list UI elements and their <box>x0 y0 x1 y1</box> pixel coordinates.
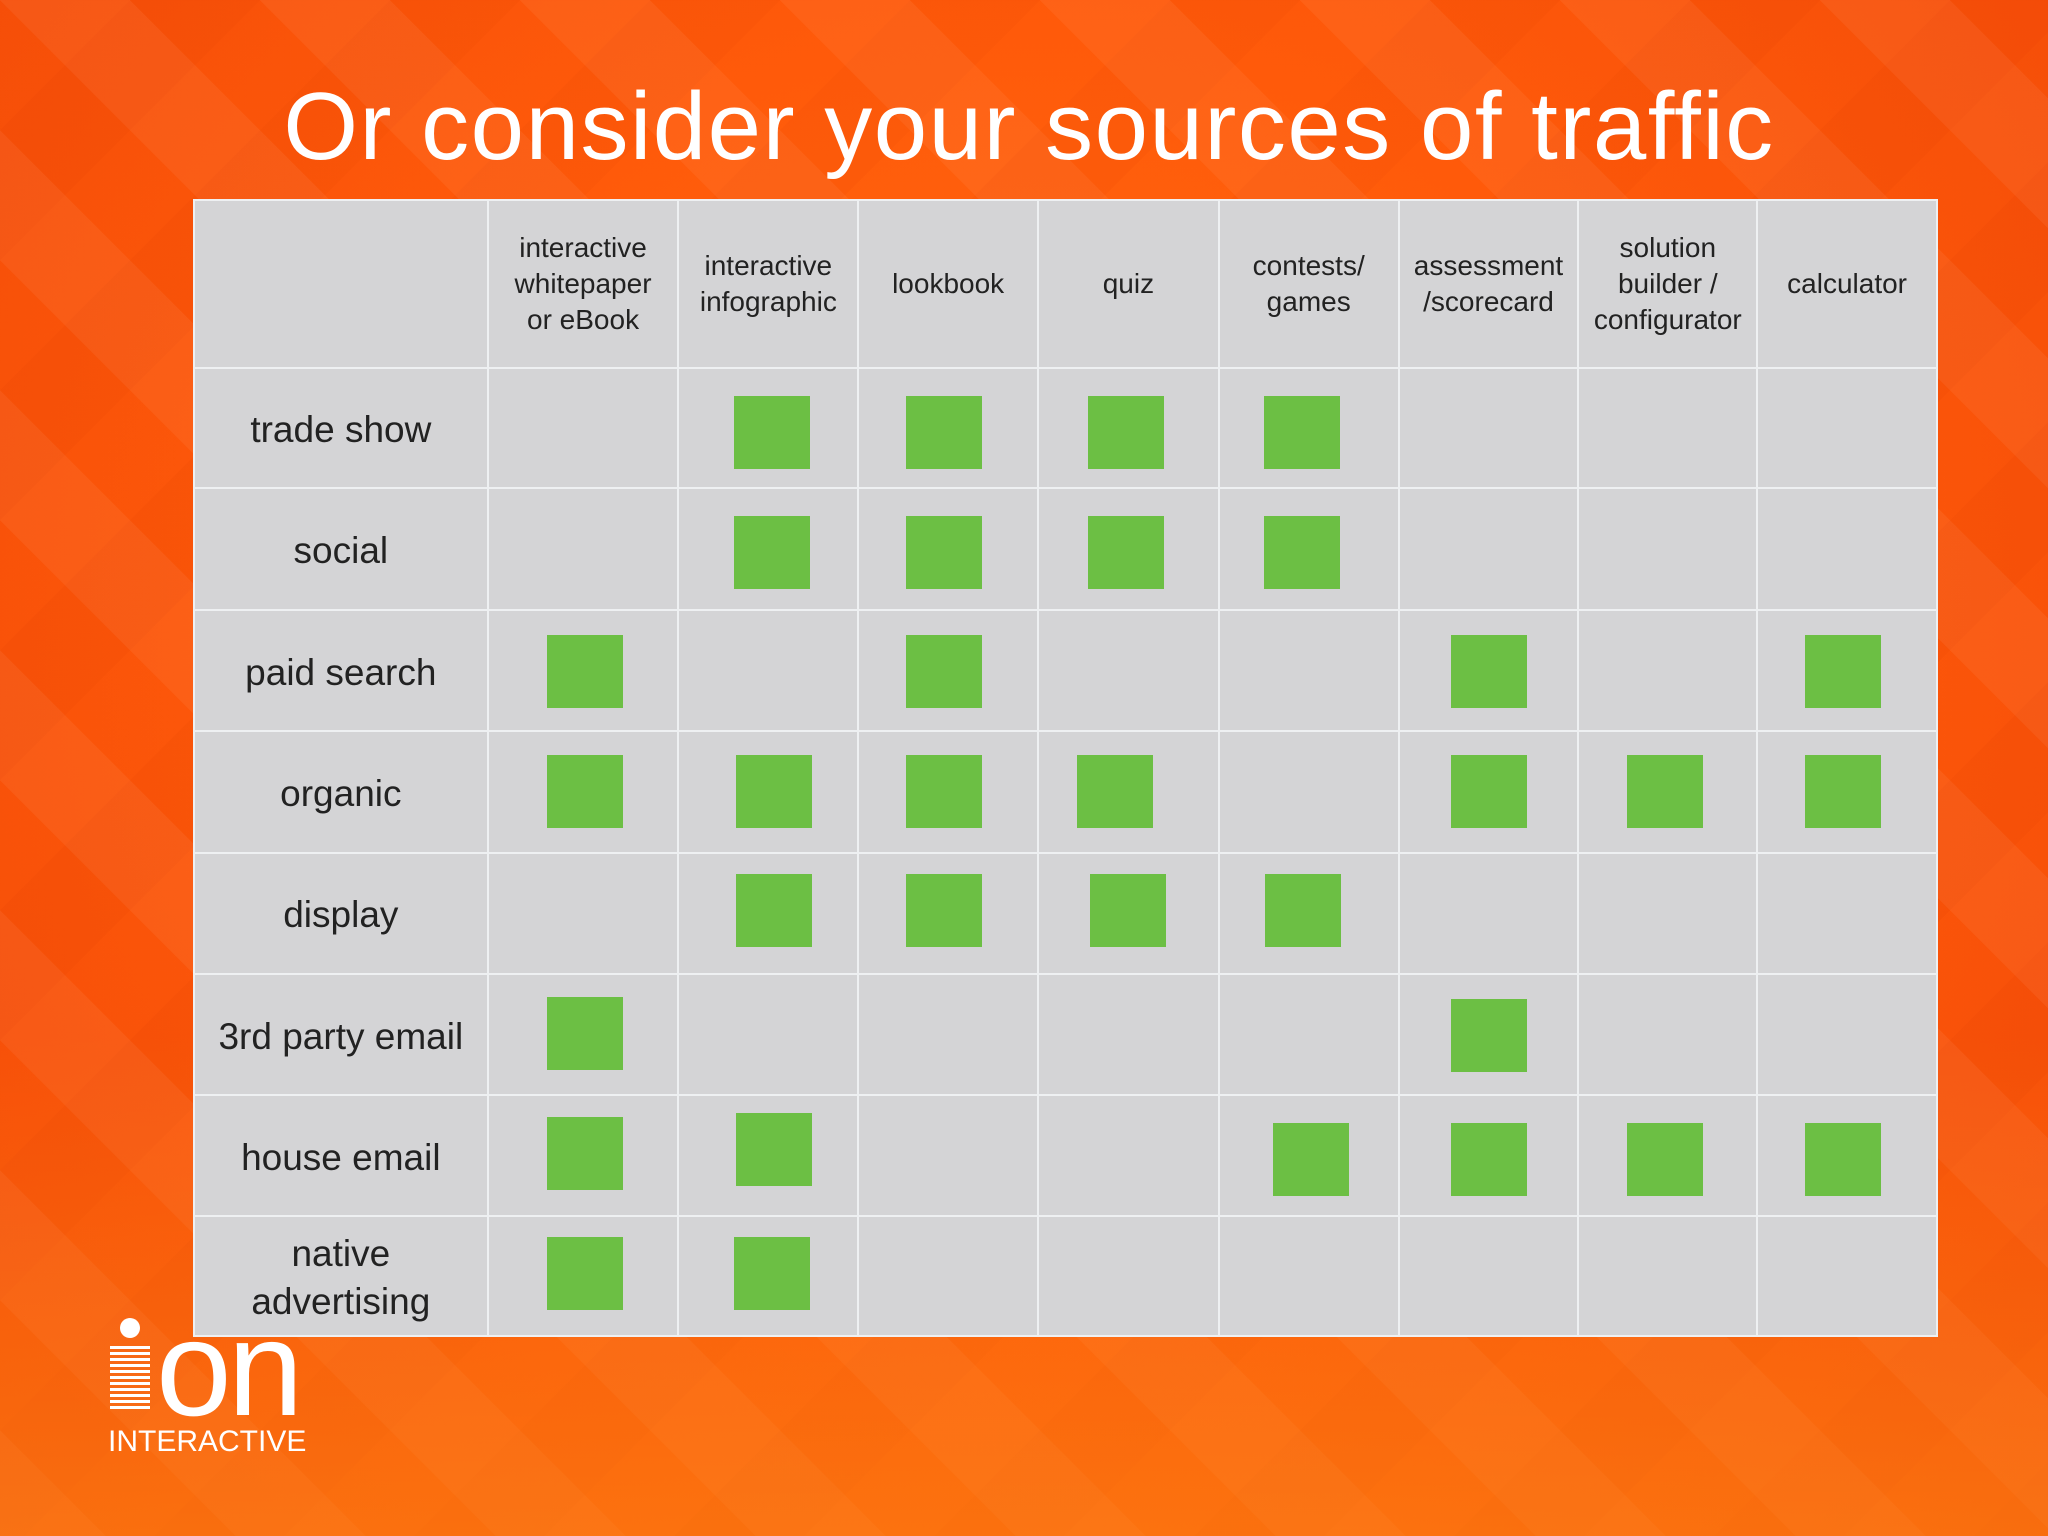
table: games <box>1267 286 1351 317</box>
table: trade show <box>250 409 431 450</box>
logo: ion interactive: INTERACTIVE <box>108 1425 306 1458</box>
table: paid search <box>245 652 436 693</box>
table: social <box>294 530 388 571</box>
table: builder / <box>1618 268 1718 299</box>
table: native <box>291 1233 390 1274</box>
table: /scorecard <box>1423 286 1554 317</box>
table: configurator <box>1594 304 1742 335</box>
table: lookbook <box>892 268 1004 299</box>
table: infographic <box>700 286 837 317</box>
table: contests/ <box>1253 250 1365 281</box>
table: assessment <box>1414 250 1563 281</box>
table: or eBook <box>527 304 639 335</box>
table: solution <box>1620 232 1716 263</box>
logo: ion interactive: on <box>156 1292 299 1444</box>
title: Or consider your sources of traffic <box>283 73 1775 180</box>
table: whitepaper <box>515 268 652 299</box>
table: interactive <box>519 232 647 263</box>
table <box>193 199 1938 1337</box>
table: display <box>283 894 398 935</box>
table: interactive <box>705 250 832 281</box>
table: quiz <box>1103 268 1154 299</box>
logo: ion interactive <box>108 1292 306 1458</box>
table: organic <box>280 773 402 814</box>
table: house email <box>241 1137 441 1178</box>
table: 3rd party email <box>218 1016 463 1057</box>
table: calculator <box>1787 268 1907 299</box>
green markers <box>547 396 1881 1310</box>
table: advertising <box>251 1281 430 1322</box>
